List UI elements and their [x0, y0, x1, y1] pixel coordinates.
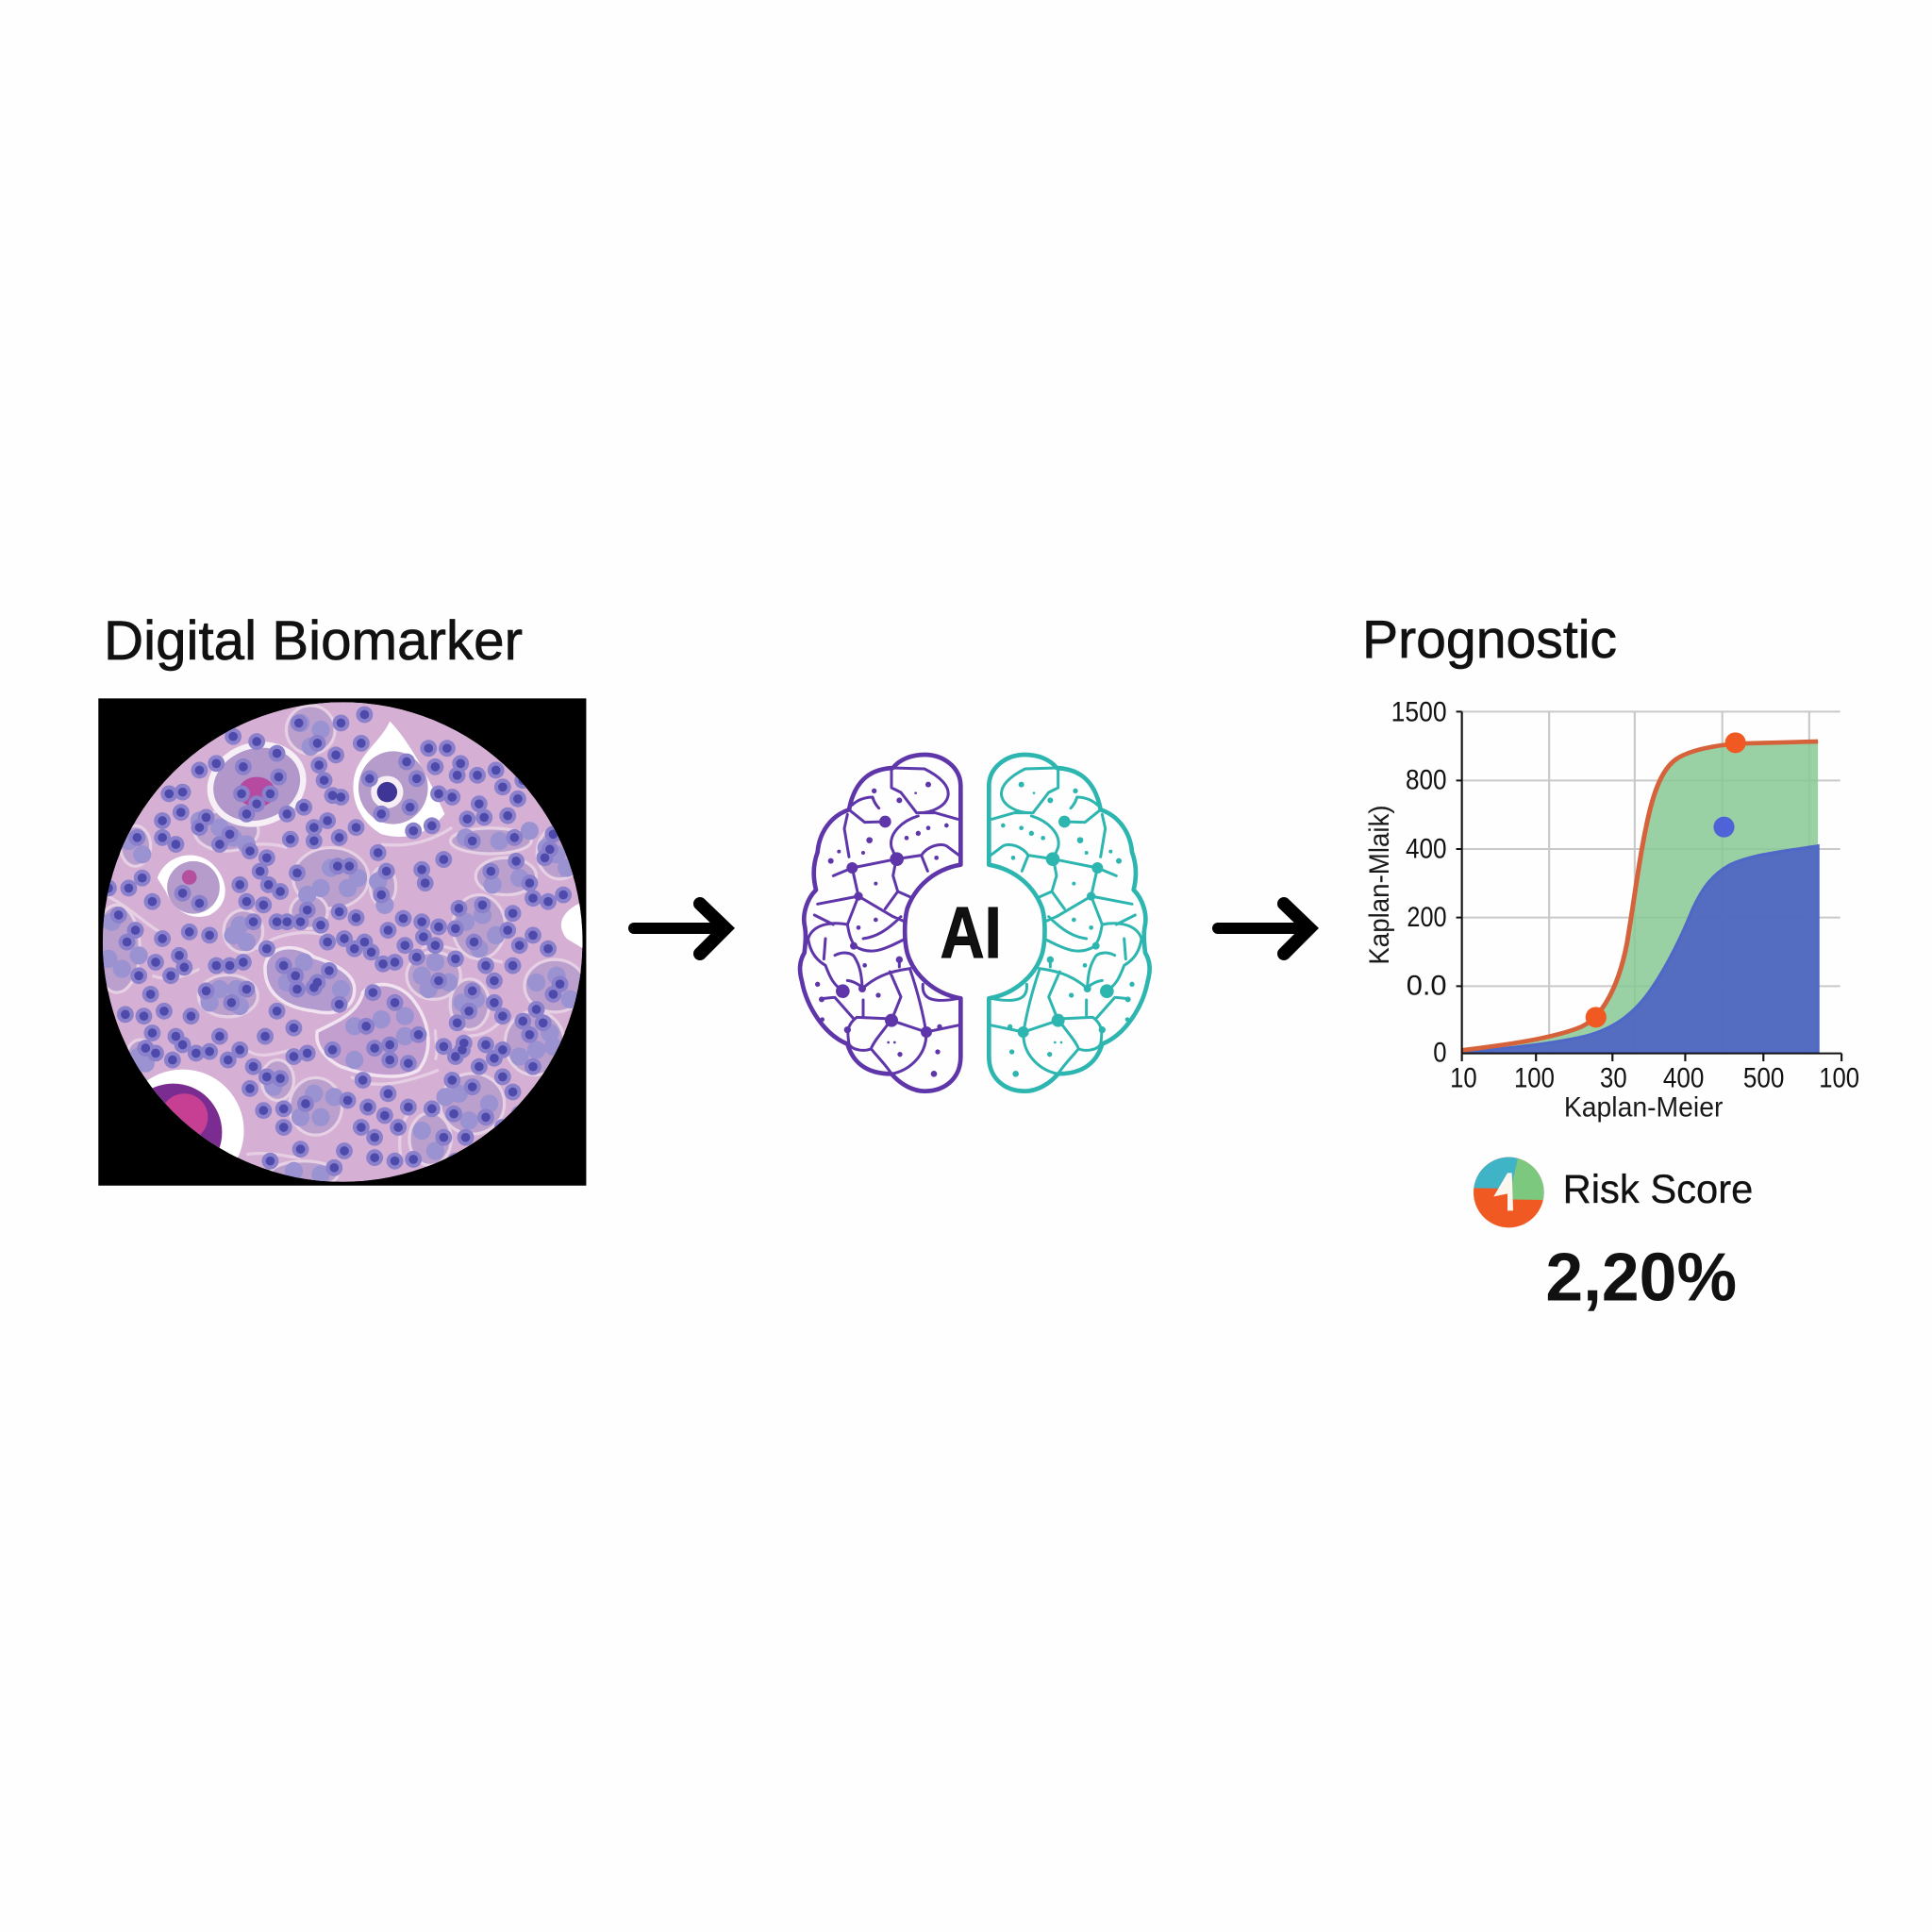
- chart: x-axis title: Kaplan-Meier: [1564, 1091, 1723, 1123]
- chart: y-axis tick labels: 400: [1406, 832, 1447, 864]
- chart: y-axis title: Kaplan-Mlaik): [1364, 805, 1395, 965]
- chart: x-axis tick labels: 400: [1663, 1062, 1704, 1093]
- chart: Kaplan-Meier curves: [1364, 695, 1859, 1123]
- infographic canvas: [98, 619, 1858, 1311]
- icon: risk gauge: [1474, 1157, 1544, 1228]
- label: Risk Score: Risk Score: [1563, 1167, 1753, 1212]
- tissue: large central ducts: [265, 948, 428, 1076]
- tissue: lumen duct left: [158, 856, 225, 917]
- chart: orange curve: [1462, 741, 1818, 1050]
- tissue: lumen, bottom left: [147, 1070, 244, 1158]
- chart: grid lines: [1462, 711, 1840, 1054]
- brain icon with AI label: [800, 755, 1150, 1091]
- tissue: lumen duct top left: [208, 741, 306, 827]
- brain: right hemisphere: [989, 755, 1150, 1091]
- brain: left hemisphere: [800, 755, 960, 1091]
- chart: x-axis tick labels: 100: [1514, 1062, 1555, 1093]
- chart: blue area: [1462, 846, 1818, 1053]
- chart: y-axis tick labels: 800: [1406, 764, 1447, 795]
- label: AI: AI: [941, 892, 1002, 974]
- heading: Digital Biomarker: Digital Biomarker: [104, 610, 523, 672]
- heading: Prognostic: Prognostic: [1362, 609, 1617, 670]
- chart: y-axis tick labels: 0.0: [1407, 970, 1447, 1001]
- chart: x-axis tick labels: 500: [1743, 1062, 1784, 1093]
- tissue: lumen duct top: [353, 722, 444, 837]
- value: 2,20%: 2,20%: [1545, 1239, 1737, 1315]
- panel: histology image: [94, 698, 586, 1192]
- chart: x-axis tick labels: 100: [1819, 1062, 1859, 1093]
- arrow: AI to prognostic: [1218, 904, 1309, 954]
- chart: x-axis tick labels: [1450, 1062, 1859, 1093]
- tissue: pale stroma strands: [105, 827, 506, 1161]
- chart: y-axis tick labels: 200: [1407, 901, 1447, 933]
- chart: data points: [1586, 732, 1746, 1027]
- chart: x-axis tick labels: 10: [1450, 1062, 1477, 1093]
- chart: y-axis tick labels: 1500: [1391, 695, 1447, 727]
- tissue: white lumen, right edge: [561, 902, 584, 949]
- chart: axes: [1457, 711, 1841, 1061]
- arrow: biomarker to AI: [634, 904, 725, 954]
- chart: x-axis tick labels: 30: [1600, 1062, 1627, 1093]
- chart: y-axis tick labels: [1391, 695, 1447, 1068]
- chart: green band: [1462, 741, 1818, 1053]
- chart: y-axis tick labels: 0: [1433, 1036, 1447, 1068]
- risk score block: [1472, 1154, 1753, 1315]
